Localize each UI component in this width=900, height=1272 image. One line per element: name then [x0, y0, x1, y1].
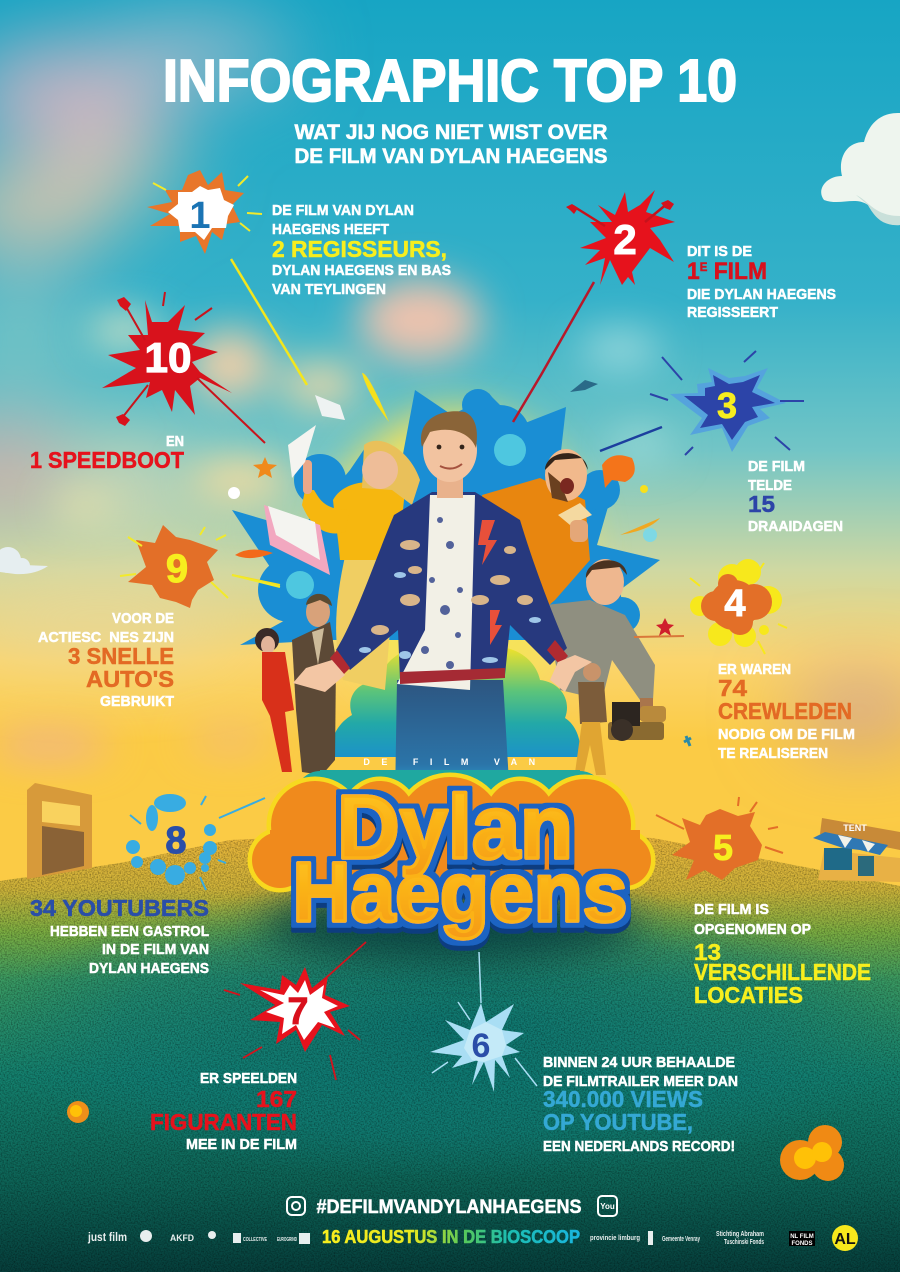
item 5: text: DE FILM IS [694, 901, 769, 918]
item 1: text: VAN TEYLINGEN [272, 281, 386, 298]
item 6: text: OP YOUTUBE, [543, 1109, 693, 1135]
icon: youtube [598, 1196, 617, 1216]
character: small man walking [574, 663, 607, 782]
character: woman in red [255, 628, 294, 772]
logo: Dylan Haegens [292, 778, 628, 939]
item 10: burst [102, 292, 265, 443]
item 2: text: 1 [687, 258, 700, 285]
item 9: text: VOOR DE [112, 610, 174, 627]
item 1: text: DE FILM VAN DYLAN [272, 202, 414, 219]
item 8: text: IN DE FILM VAN [102, 941, 209, 958]
sponsor logos: just film [87, 1230, 127, 1244]
character: man in orange shirt [482, 449, 592, 630]
item 3: text: DE FILM [748, 458, 805, 475]
item 4: text: CREWLEDEN [718, 698, 852, 724]
logo: Dylan Haegens: Haegens [292, 845, 628, 939]
item 2: text: DIT IS DE [687, 243, 752, 260]
item 3: burst: 3 [717, 385, 737, 426]
building: tosti tent: TENT [843, 823, 867, 833]
logo: Dylan Haegens: Dylan [337, 778, 573, 878]
item 5: burst [656, 797, 783, 880]
building: tosti tent [813, 818, 900, 882]
item 8: text: 34 YOUTUBERS [30, 895, 209, 921]
hashtag: #DEFILMVANDYLANHAEGENS [316, 1197, 582, 1218]
tagline: de film van: DE FILM VAN [363, 757, 547, 767]
item 6: text: EEN NEDERLANDS RECORD! [543, 1138, 735, 1155]
building left [27, 783, 92, 879]
item 3: text: TELDE [748, 477, 792, 494]
subtitle [294, 121, 608, 168]
item 5: text: VERSCHILLENDE [694, 959, 871, 985]
item 7: text: ER SPEELDEN [200, 1070, 297, 1087]
icon: youtube: You [600, 1202, 615, 1211]
sky background [0, 0, 900, 1000]
age rating badge [832, 1225, 858, 1251]
sponsor logos: EUROGRIND [277, 1237, 297, 1243]
item 1: text: 2 REGISSEURS, [272, 236, 447, 262]
item 8: text [30, 895, 209, 977]
item 4: text: ER WAREN [718, 661, 791, 678]
item 1: burst [147, 170, 307, 385]
item 5: text: OPGENOMEN OP [694, 921, 811, 938]
item 8: burst: 8 [165, 820, 187, 862]
item 4: burst: 4 [724, 583, 746, 625]
item 9: text: ACTIESC NES ZIJN [38, 629, 174, 646]
item 1: burst: 1 [189, 195, 211, 237]
item 7: text: 167 [256, 1086, 297, 1112]
sponsor logos: Gemeente Venray [662, 1236, 700, 1243]
item 3: text: 15 [748, 491, 775, 517]
item 8: burst [126, 794, 265, 890]
item 7: burst: 7 [287, 991, 309, 1033]
item 4: text: NODIG OM DE FILM [718, 726, 855, 743]
item 3: burst [650, 351, 804, 455]
item 4: text: TE REALISEREN [718, 745, 828, 762]
item 7: text: MEE IN DE FILM [186, 1136, 297, 1153]
item 4: text [718, 661, 855, 762]
character: man in suit [292, 594, 336, 775]
item 8: text: DYLAN HAEGENS [89, 960, 209, 977]
sponsor logos [87, 1230, 815, 1247]
item 8: text: HEBBEN EEN GASTROL [50, 923, 209, 940]
age rating badge: AL [834, 1231, 856, 1248]
item 7: burst [224, 942, 366, 1080]
item 2: text: REGISSEERT [687, 304, 778, 321]
item 2: text [687, 243, 836, 321]
camera [608, 702, 666, 741]
item 6: text: 340.000 VIEWS [543, 1086, 703, 1112]
item 5: text [694, 901, 871, 1008]
item 6: text: DE FILMTRAILER MEER DAN [543, 1073, 738, 1090]
item 2: text: FILM [707, 258, 767, 285]
item 4: text: 74 [718, 675, 747, 701]
item 1: text [272, 202, 451, 298]
item 10: text [30, 433, 184, 473]
item 9: burst [120, 525, 280, 608]
item 6: text [543, 1054, 738, 1155]
item 5: text: LOCATIES [694, 982, 803, 1008]
sponsor logos: COLLECTIVE [243, 1237, 268, 1243]
sponsor logos: FONDS [792, 1241, 812, 1247]
item 6: burst [430, 952, 537, 1092]
item 3: text [748, 458, 843, 535]
item 6: text: BINNEN 24 UUR BEHAALDE [543, 1054, 735, 1071]
item 1: text: HAEGENS HEEFT [272, 221, 389, 238]
character: man in grey sweater [546, 559, 655, 720]
item 3: text: DRAAIDAGEN [748, 518, 843, 535]
item 2: text: E [700, 260, 707, 274]
subtitle: WAT JIJ NOG NIET WIST OVER [294, 121, 608, 144]
item 1: text: DYLAN HAEGENS EN BAS [272, 262, 451, 279]
item 9: text [38, 610, 174, 710]
item 7: text: FIGURANTEN [150, 1109, 297, 1135]
item 9: text: AUTO'S [86, 666, 174, 692]
grass hill [0, 836, 900, 1272]
logo cloud [250, 770, 653, 890]
sponsor logos: provincie limburg [590, 1235, 640, 1242]
sponsor logos: AKFD [170, 1233, 194, 1243]
small cloud left [0, 547, 48, 574]
item 4: burst [690, 559, 787, 654]
decorative comic accents [67, 373, 844, 1181]
item 5: text: 13 [694, 939, 721, 965]
release date: 16 AUGUSTUS IN DE BIOSCOOP [322, 1227, 580, 1247]
item 9: burst: 9 [166, 547, 188, 591]
sponsor logos: NL FILM [790, 1234, 814, 1240]
central burst and glow [232, 389, 660, 710]
subtitle: DE FILM VAN DYLAN HAEGENS [294, 145, 608, 168]
item 2: burst [513, 190, 675, 422]
cloud behind legs [330, 647, 580, 757]
title: INFOGRAPHIC TOP 10 [163, 48, 737, 114]
icon: instagram [287, 1197, 305, 1215]
cloud top right [821, 113, 900, 225]
item 6: burst: 6 [472, 1027, 490, 1065]
item 9: text: GEBRUIKT [100, 693, 174, 710]
item 10: text: EN [166, 433, 184, 450]
item 9: text: 3 SNELLE [68, 643, 174, 669]
item 2: text: DIE DYLAN HAEGENS [687, 286, 836, 303]
item 10: text: 1 SPEEDBOOT [30, 447, 184, 473]
item 5: burst: 5 [713, 827, 733, 868]
sponsor logos: Stichting Abraham [716, 1231, 764, 1238]
character: Dylan Haegens main figure [293, 411, 592, 800]
character: woman in yellow [264, 441, 420, 690]
item 2: burst: 2 [613, 216, 637, 263]
item 7: text [150, 1070, 297, 1153]
item 10: burst: 10 [144, 334, 192, 381]
sponsor logos: Tuschinski Fonds [724, 1239, 764, 1246]
